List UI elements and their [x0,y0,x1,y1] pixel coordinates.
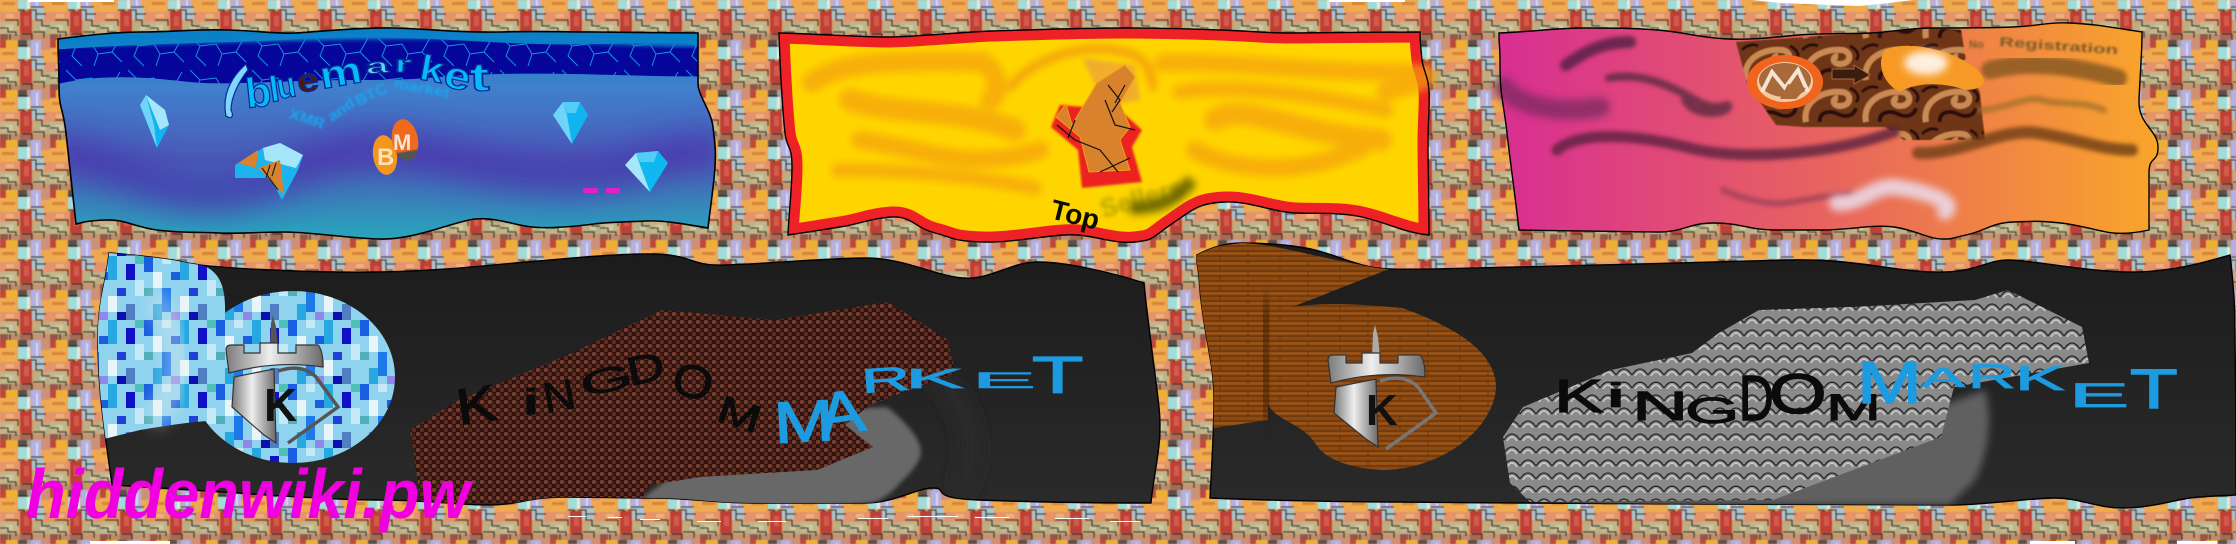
gray wave [640,407,921,506]
icon: diamond 3 [553,102,588,144]
MARKET text: E [972,368,1036,393]
wood patch [1265,304,1496,470]
panel: yellow TopSellers banner [779,28,1429,242]
bluemarket logo text: e [440,53,475,100]
KINGDOM text: M [1826,387,1881,428]
MARKET text: M [772,388,836,455]
KINGDOM text [453,343,767,441]
faint arcs [900,340,970,490]
panel outline [779,28,1429,242]
icon: bitcoin coin [370,134,400,176]
KINGDOM text: D [1739,362,1774,434]
brown beads area [410,302,955,503]
subtitle text: XMR [287,106,327,133]
icon: monero coin: M [393,130,411,155]
MARKET text: M [1857,349,1922,416]
KINGDOM text: K [1554,370,1603,423]
No Registration text [1969,34,2119,57]
KINGDOM text: M [712,387,767,441]
KINGDOM text: D [622,343,669,394]
hiddenwiki.pw watermark: hiddenwiki.pw [26,455,474,533]
MARKET text: R [1968,357,2016,396]
gray wave [1530,390,1989,505]
KINGDOM text: K [453,374,500,436]
MARKET text: K [905,363,964,394]
MARKET text: K [2015,360,2064,398]
TopSellers text: Sellers [1096,171,1187,224]
subtitle text: and [325,95,358,125]
KINGDOM text: O [1769,363,1827,425]
bluemarket logo text: a [365,54,390,79]
bluemarket logo text: l [266,68,282,110]
No Registration text: Registration [1999,34,2119,57]
icon: kingdom castle shield: K [264,379,297,431]
MARKET text [772,346,1083,455]
MARKET text [1857,349,2178,420]
KINGDOM text: G [577,356,636,404]
icon: orange blob [1881,46,1984,92]
bluemarket logo text: t [469,54,490,100]
TopSellers text: Top [1048,194,1103,236]
bluemarket logo text [225,48,490,118]
icon: diamond 4 [625,151,668,192]
chocolate swirl area [1736,28,1985,140]
panel: bluemarket banner [50,20,730,239]
KINGDOM text: i [522,382,540,422]
panel outline [58,28,715,239]
KINGDOM text: O [668,354,718,411]
wood corner [1190,243,1389,428]
mosaic corner [98,253,226,439]
icon: diamond with orange facets [235,143,303,200]
icon: arrow [1832,65,1870,84]
MARKET text: T [1032,346,1083,404]
KINGDOM text [1554,362,1881,434]
icon: kingdom castle shield [226,315,338,443]
KINGDOM text: G [1685,391,1739,431]
panel outline [1499,23,2158,239]
mosaic ellipse [191,291,395,463]
No Registration text: No [1969,39,1984,51]
blurred smears [1504,42,2132,212]
bluemarket logo text: k [417,48,448,91]
bluemarket logo text: u [274,65,299,107]
bluemarket logo text: m [316,49,365,98]
MARKET text: A [1921,362,1965,393]
KINGDOM text: N [1632,384,1688,429]
MARKET text: R [860,359,912,401]
wood shadow [1265,300,1268,420]
panel: Kingdom Market banner with mosaic [95,250,1160,506]
icon: kingdom castle shield: K [1366,386,1398,435]
KINGDOM text: N [540,371,579,423]
TopSellers text [1048,171,1192,236]
subtitle text [287,75,452,133]
bluemarket logo text: r [394,50,413,78]
MARKET text: E [2069,376,2129,415]
bluemarket logo text: e [294,62,321,100]
icon: monero circle [1747,55,1823,109]
magenta dashes [583,188,620,193]
subtitle text: market [392,75,452,102]
icon: bitcoin coin: B [377,144,394,171]
panel: Kingdom Market banner with wood [1190,243,2236,508]
KINGDOM text: i [1606,377,1626,415]
icon: kingdom castle shield [1328,325,1436,449]
MARKET text: T [2130,359,2178,420]
icon: monero coin [389,117,421,163]
icon: flaming hand [1051,58,1142,188]
subtitle text: BTC [353,80,390,109]
bluemarket logo text: b [243,68,273,117]
orange swirls [812,49,1428,188]
gray mesh area [1503,290,2089,502]
MARKET text: A [814,376,869,449]
icon: diamond 1 [140,95,169,148]
panel: pink-orange No Registration banner [1499,23,2158,239]
